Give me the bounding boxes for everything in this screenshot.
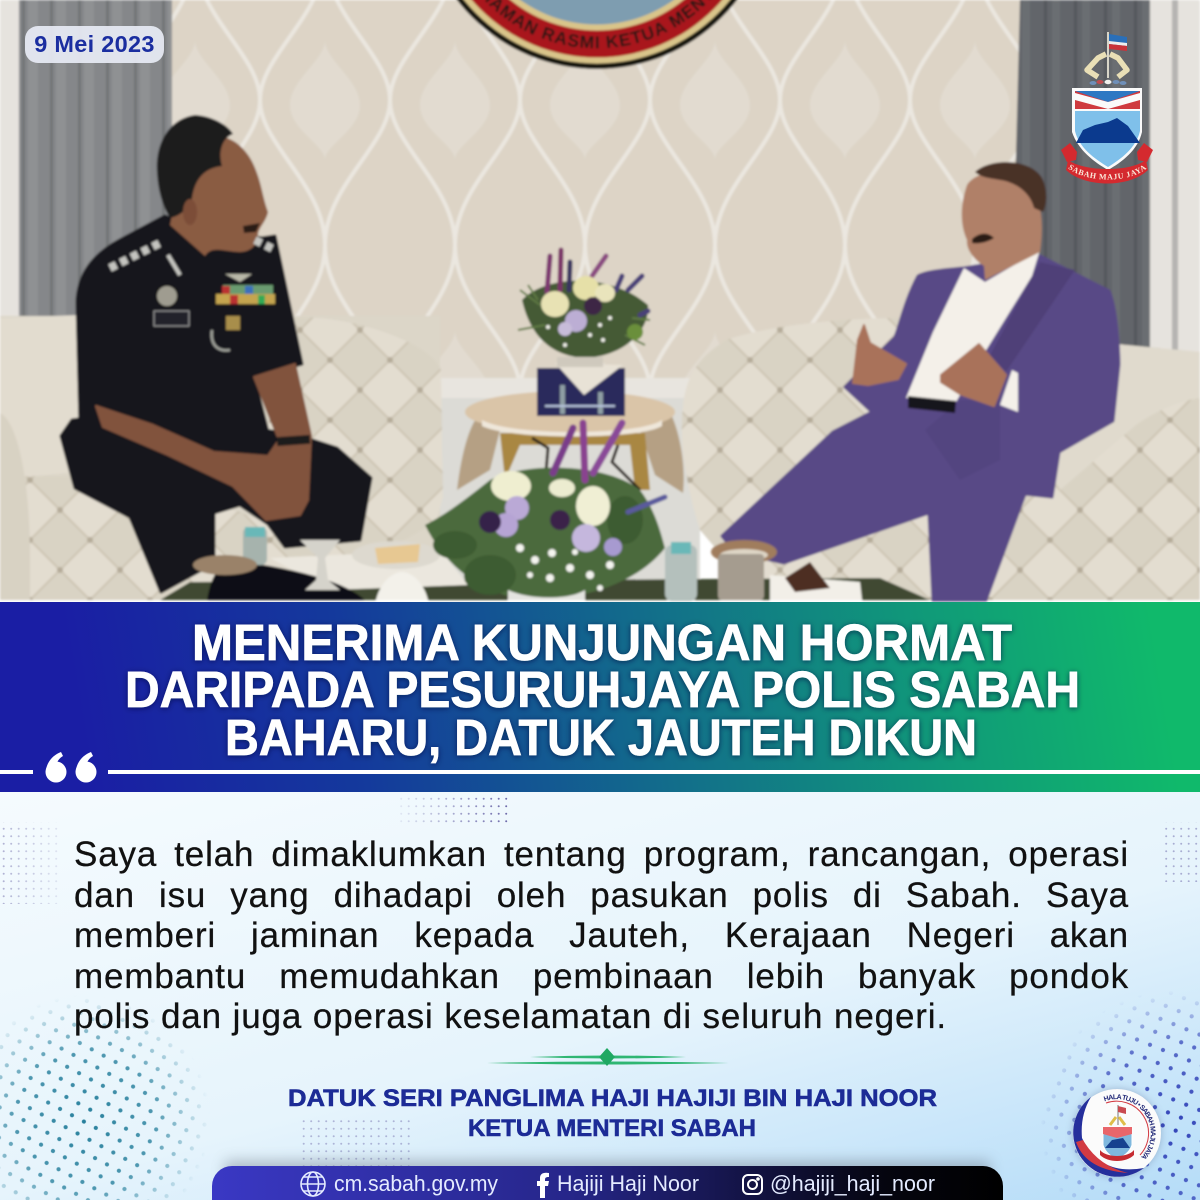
uniform torso (77, 216, 302, 440)
icon: globe (301, 1172, 325, 1196)
ring text (1105, 1099, 1151, 1157)
quote body text: memberi jaminan kepada Jauteh, Kerajaan Negeri akan (74, 916, 1129, 955)
signatory name and title (288, 1085, 937, 1142)
arm and hands (96, 364, 311, 520)
flower arrangement: lower (425, 423, 665, 600)
epaulette stars (110, 240, 275, 268)
trousers (61, 410, 371, 592)
title text (125, 614, 1080, 766)
wainscot moulding (430, 378, 700, 600)
aiguillette (212, 330, 230, 350)
quote body text (74, 835, 1129, 1036)
mini crest (1100, 1105, 1134, 1161)
beads (1090, 80, 1126, 85)
website text: cm.sabah.gov.my (334, 1171, 498, 1196)
water bottle right (665, 545, 697, 601)
icon: quotation marks (46, 752, 96, 782)
signatory name and title: KETUA MENTERI SABAH (468, 1115, 756, 1142)
date badge (25, 26, 164, 63)
lower dot block (300, 1118, 412, 1166)
hands holding pole (1087, 54, 1127, 77)
quote body text: Saya telah dimaklumkan tentang program, rancangan, operasi (74, 835, 1129, 874)
neck, face and hair (170, 136, 268, 256)
title text: MENERIMA KUNJUNGAN HORMAT (192, 614, 1012, 671)
hands (853, 325, 906, 385)
neck, face and hair (962, 172, 1042, 280)
white shirt (906, 250, 1040, 402)
ornamental divider (488, 1048, 728, 1066)
flag and pole (1107, 32, 1127, 78)
tumbler glass (718, 554, 764, 600)
swoosh: blue and red arcs (1073, 1097, 1144, 1177)
quote body text: membantu memudahkan pembinaan lebih banyak pondok (74, 956, 1129, 996)
sofa: left (0, 315, 443, 600)
left curtain and column (0, 0, 172, 330)
wall plaque emblem (455, 0, 739, 70)
date badge: 9 Mei 2023 (34, 31, 155, 57)
coffee table with refreshments (160, 527, 930, 601)
signatory name and title: DATUK SERI PANGLIMA HAJI HAJIJI BIN HAJI NOOR (288, 1085, 937, 1112)
right halftone swirl (1030, 990, 1200, 1200)
white cup (376, 572, 428, 600)
water bottle left (243, 527, 267, 565)
medal ribbons (216, 285, 275, 304)
red ribbon with motto (1061, 143, 1153, 184)
title band (0, 602, 1200, 792)
wine glass (300, 540, 340, 590)
snack plate (352, 541, 440, 569)
icon: Sabah state crest (1061, 32, 1153, 184)
page background below the band (0, 791, 1200, 1200)
quote body text: polis dan juga operasi keselamatan di seluruh negeri. (74, 997, 947, 1036)
halftone dot decorations (0, 798, 1200, 1200)
name tag (154, 311, 189, 326)
facebook text: Hajiji Haji Noor (557, 1171, 699, 1196)
collar pin (168, 255, 180, 275)
tissue box (537, 368, 625, 416)
footer contact bar (212, 1154, 1003, 1200)
red ribbon with motto: SABAH MAJU JAYA (1068, 164, 1146, 180)
icon: facebook (537, 1173, 549, 1198)
basket left (193, 555, 257, 575)
wallpaper wall (165, 0, 1025, 400)
napkin and cake (770, 575, 862, 600)
title text: DARIPADA PESURUHJAYA POLIS SABAH (125, 661, 1080, 718)
seated man: police commissioner (61, 115, 371, 592)
sofa: right (682, 318, 1200, 600)
right dot block (1165, 822, 1198, 882)
top dot block (400, 798, 508, 822)
shield (1072, 88, 1142, 170)
icon: instagram (743, 1175, 762, 1194)
left dot block (0, 822, 58, 904)
left halftone swirl (0, 999, 206, 1200)
rattan basket right (711, 540, 777, 564)
badge: Hala Tuju Sabah Maju Jaya logo: HALA TUJU • SABAH MAJU JAYA (1104, 1094, 1156, 1159)
instagram text: @hajiji_haji_noor (770, 1171, 935, 1196)
quote body text: dan isu yang dihadapi oleh pasukan polis di Sabah. Saya (74, 876, 1129, 914)
flower arrangement: upper (518, 250, 650, 367)
folded cap (207, 562, 365, 600)
shirt cuff (1000, 370, 1018, 412)
belt (908, 396, 956, 413)
badge: Hala Tuju Sabah Maju Jaya logo (1070, 1086, 1164, 1180)
seated man: chief minister in purple suit (722, 162, 1119, 600)
purple suit (722, 256, 1119, 600)
side table with lace cloth and gold legs (457, 363, 684, 493)
wings badge (225, 274, 252, 282)
photo: courtesy call meeting (0, 0, 1200, 602)
right curtain and column (1011, 0, 1200, 360)
divider rule with quote marks (0, 752, 1200, 782)
title text: BAHARU, DATUK JAUTEH DIKUN (225, 709, 977, 766)
police badge (156, 285, 178, 307)
watch (277, 435, 310, 446)
